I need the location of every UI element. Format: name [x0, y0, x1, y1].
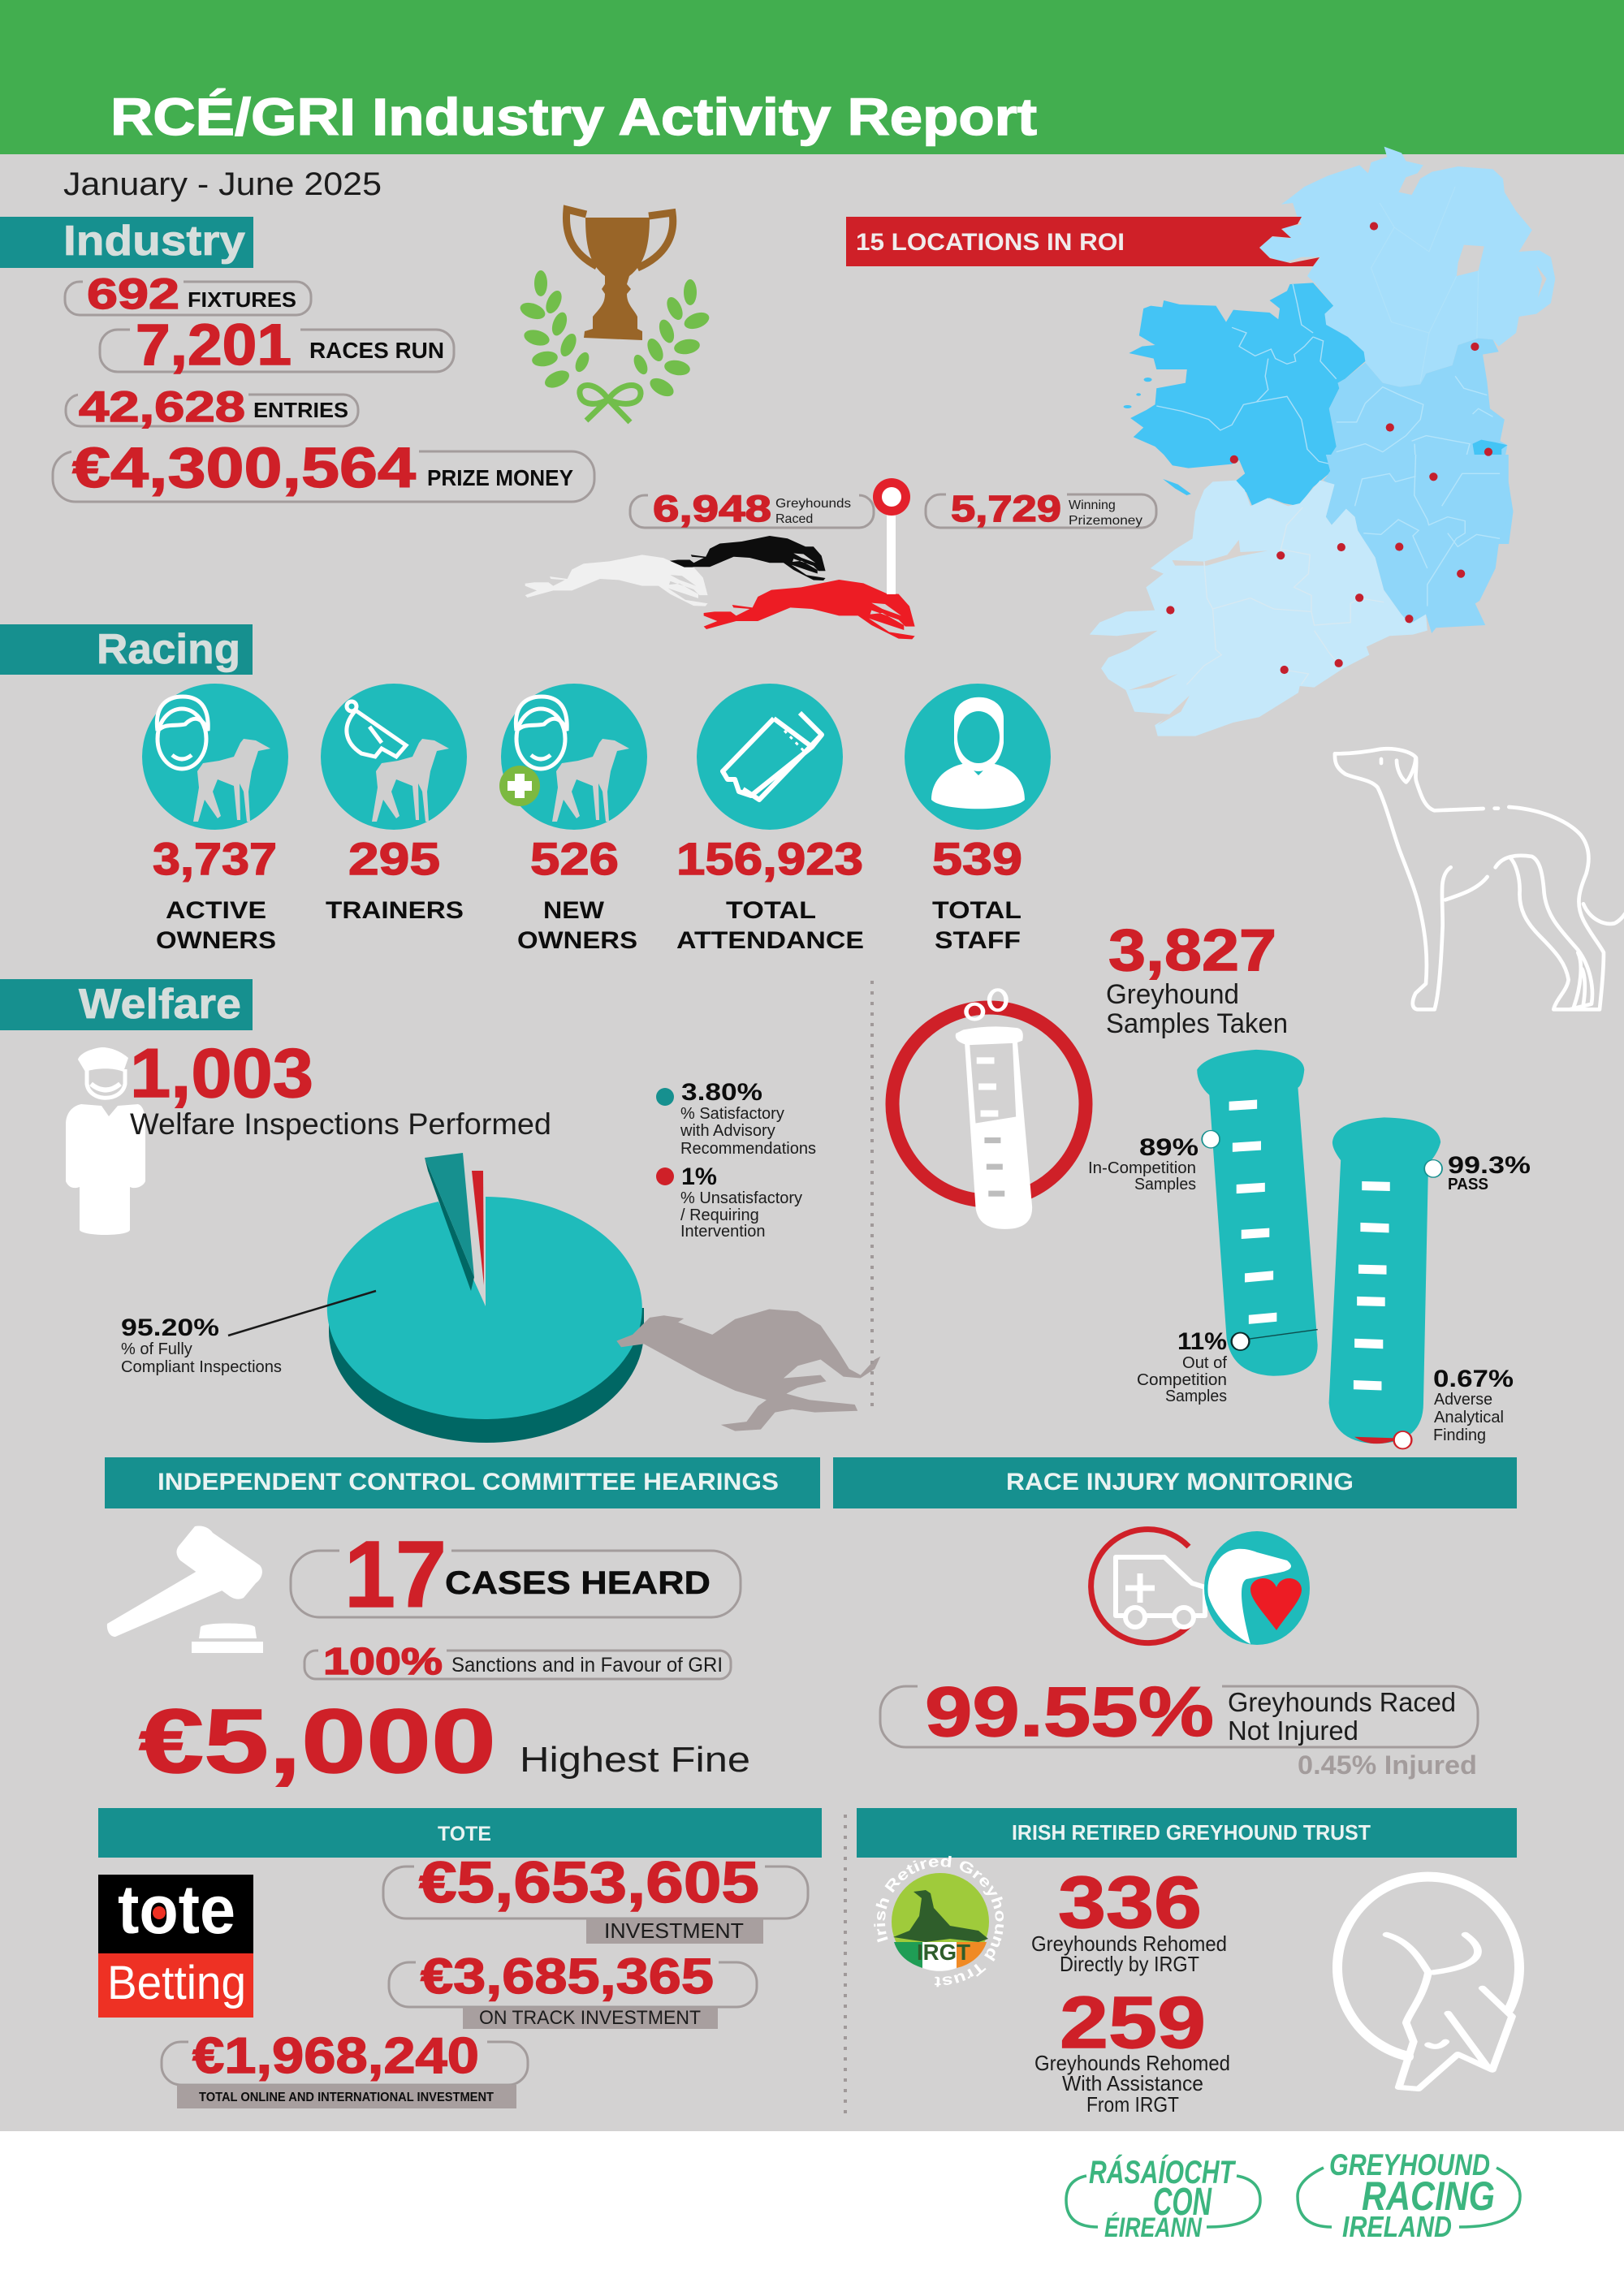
- greyhound: black: [670, 536, 826, 580]
- label: adverse analytical finding: 0.67%: [1433, 1366, 1514, 1392]
- section heading: Welfare: [0, 979, 253, 1030]
- dog head: [1207, 1549, 1291, 1644]
- label: in-competition samples: [1088, 1134, 1199, 1193]
- stat: rehomed with assistance: 259: [1060, 1983, 1206, 2064]
- stat: online and international investment: €1,968,240: [192, 2028, 479, 2084]
- pie slice: satisfactory with advisory: [425, 1153, 474, 1291]
- label: in-competition samples: In-Competition: [1088, 1159, 1196, 1177]
- chart: competition samples tube: [1197, 1050, 1318, 1376]
- stat: trainers: [321, 684, 467, 924]
- stat: cases heard: CASES HEARD: [445, 1565, 710, 1601]
- logo: tote betting: tote: [118, 1871, 235, 1948]
- section heading: Racing: [0, 624, 253, 675]
- stat: total attendance: 156,923: [676, 833, 863, 884]
- stat: on track investment: ON TRACK INVESTMENT: [479, 2007, 701, 2029]
- stat: sanctions in favour: [304, 1640, 731, 1682]
- map feature: western islands: [1124, 378, 1152, 408]
- stat: rehomed with assistance: [1034, 1983, 1230, 2117]
- logo: Rásaíocht Con Éireann: RÁSAÍOCHT: [1089, 2154, 1237, 2190]
- chart: pass and adverse finding tube: [1329, 1117, 1442, 1448]
- icon: whistle: [347, 701, 406, 757]
- greyhound: red: [704, 580, 915, 639]
- stat: fixtures: FIXTURES: [188, 287, 296, 312]
- stat: online and international investment: [162, 2028, 528, 2108]
- banner: 15 locations: 15 LOCATIONS IN ROI: [856, 229, 1125, 256]
- stat: greyhound samples taken: [1106, 918, 1288, 1039]
- map feature: Shannon estuary and bays: [1129, 540, 1268, 725]
- stat: races run: RACES RUN: [309, 338, 444, 363]
- label: in-competition samples: 89%: [1139, 1134, 1199, 1161]
- stat: total attendance: [676, 684, 864, 954]
- subtitle: date range: January - June 2025: [63, 166, 382, 202]
- marker: pass: [1424, 1160, 1442, 1177]
- map feature: Strangford Lough: [1536, 265, 1547, 298]
- stat: total staff: STAFF: [935, 927, 1021, 954]
- stat: new owners: [499, 684, 647, 954]
- tube ticks: [977, 1057, 998, 1117]
- label: in-competition samples: Samples: [1134, 1176, 1196, 1193]
- logo: tote betting: Betting: [107, 1957, 246, 2009]
- section heading: Industry: Industry: [63, 218, 245, 265]
- legend: satisfactory: [656, 1079, 816, 1158]
- stat: prize money: €4,300,564: [72, 436, 416, 499]
- stat: prize money: PRIZE MONEY: [427, 465, 573, 490]
- heading: irish retired greyhound trust: [857, 1808, 1517, 1858]
- label: pass: PASS: [1448, 1176, 1488, 1193]
- stat: greyhound samples taken: Samples Taken: [1106, 1008, 1288, 1039]
- dog back dot: [1495, 803, 1498, 814]
- label: adverse analytical finding: Adverse: [1434, 1391, 1492, 1409]
- map region: Dublin: [1473, 440, 1507, 461]
- stat: trainers: 295: [348, 833, 440, 884]
- tube scale ticks: [1229, 1100, 1276, 1324]
- stat: winning prizemoney: Prizemoney: [1069, 514, 1142, 528]
- map region: south: [1090, 481, 1427, 736]
- illustration: three running greyhounds: [525, 536, 915, 639]
- map region: east lower: [1326, 455, 1512, 633]
- stat: fixtures: [65, 270, 311, 318]
- pie slice: unsatisfactory: [472, 1171, 484, 1285]
- stat: active owners: OWNERS: [156, 927, 276, 954]
- map feature: Aran islands: [1163, 479, 1191, 495]
- map detail: southern county borders: [1186, 507, 1384, 684]
- adverse finding fill: [1354, 1437, 1399, 1444]
- stat: welfare inspections: [130, 1035, 551, 1141]
- stat: rehomed with assistance: From IRGT: [1086, 2092, 1179, 2117]
- stat: rehomed directly: Directly by IRGT: [1060, 1952, 1199, 1976]
- dog elbow: [1445, 877, 1488, 900]
- footer background: [0, 2131, 1624, 2296]
- icon: trainer dog: [372, 739, 449, 822]
- icon: ambulance and greyhound: [1091, 1530, 1310, 1645]
- heading: independent control committee hearings: [105, 1457, 820, 1508]
- illustration: grey running greyhound: [616, 1310, 880, 1431]
- map south and south-east regions: [1090, 455, 1512, 736]
- stat: entries: 42,628: [79, 383, 245, 431]
- legend: unsatisfactory: % Unsatisfactory: [680, 1189, 802, 1207]
- dog silhouette: [893, 1890, 988, 1942]
- legend: satisfactory: % Satisfactory: [680, 1105, 784, 1123]
- legend: satisfactory: 3.80%: [681, 1079, 762, 1106]
- heading: race injury monitoring: [833, 1457, 1517, 1508]
- legend: unsatisfactory: / Requiring: [680, 1206, 759, 1224]
- stat: highest fine: [139, 1690, 750, 1792]
- marker: out of competition: [1232, 1333, 1249, 1350]
- icon: new owner dog: [552, 739, 629, 822]
- stat: total staff: TOTAL: [932, 897, 1021, 924]
- stat: highest fine: Highest Fine: [520, 1740, 750, 1780]
- heart: [1250, 1578, 1302, 1630]
- legend: satisfactory: with Advisory: [680, 1122, 775, 1140]
- logo: tote betting: [98, 1871, 253, 2018]
- stat: total staff: [905, 684, 1051, 954]
- logo: Greyhound Racing Ireland: RACING: [1362, 2173, 1495, 2219]
- banner: 15 locations: [846, 217, 1320, 266]
- label: out of competition samples: 11%: [1177, 1328, 1227, 1355]
- stat: races run: 7,201: [136, 313, 292, 378]
- icon: test tube in red ring: [892, 990, 1086, 1229]
- dog back and hind leg: [1509, 807, 1604, 1009]
- stat: greyhounds raced: Greyhounds: [775, 497, 851, 511]
- panel: map of Ireland with racing locations: [1090, 147, 1555, 736]
- stat: total attendance: TOTAL: [726, 897, 816, 924]
- stat: greyhounds raced: [630, 488, 874, 529]
- stat: injured: 0.45% Injured: [1298, 1750, 1477, 1780]
- stat: on track investment: [389, 1949, 757, 2029]
- heading: tote: TOTE: [438, 1823, 491, 1845]
- pie slice: fully compliant: [327, 1197, 642, 1419]
- stat: rehomed directly: Greyhounds Rehomed: [1031, 1931, 1227, 1956]
- stat: investment: €5,653,605: [419, 1851, 759, 1915]
- stat: online and international investment: TOTAL ONLINE AND INTERNATIONAL INVESTMENT: [199, 2091, 494, 2104]
- stat: new owners: NEW: [543, 897, 605, 924]
- stat: greyhounds not injured: Not Injured: [1228, 1716, 1358, 1746]
- stat: trainers: TRAINERS: [326, 897, 464, 924]
- stat: races run: [100, 313, 454, 378]
- logo: Rásaíocht Con Éireann: CON: [1153, 2181, 1212, 2224]
- title: RCÉ/GRI Industry Activity Report: [110, 88, 1037, 146]
- legend: satisfactory: Recommendations: [680, 1140, 816, 1158]
- icon: owner dog: [193, 739, 270, 822]
- stat: total attendance: ATTENDANCE: [676, 927, 864, 954]
- dog inner hind leg: [1496, 856, 1592, 1009]
- stat: active owners: ACTIVE: [166, 897, 266, 924]
- stat: entries: [66, 383, 358, 431]
- map detail: northern county borders: [1371, 187, 1479, 382]
- label: out of competition samples: Competition: [1137, 1371, 1227, 1389]
- map markers: 15 locations: [1166, 222, 1492, 674]
- label: adverse analytical finding: Finding: [1433, 1426, 1486, 1444]
- stat: sanctions in favour: Sanctions and in Favour of GRI: [451, 1654, 723, 1677]
- bubbles: [966, 990, 1006, 1019]
- stat: new owners: OWNERS: [517, 927, 637, 954]
- map region: east upper: [1324, 339, 1514, 544]
- stat: fixtures: 692: [87, 270, 179, 318]
- section heading: Racing: Racing: [97, 626, 240, 673]
- icon: gavel: [107, 1526, 263, 1653]
- tube body: [956, 1026, 1032, 1229]
- stat: greyhounds raced: 6,948: [653, 488, 771, 529]
- section heading: Industry: [0, 217, 253, 268]
- stat: cases heard: 17: [344, 1521, 447, 1627]
- tube liquid gap: [970, 1043, 1016, 1124]
- label: pass: [1448, 1152, 1531, 1193]
- stat: welfare inspections: 1,003: [130, 1035, 313, 1112]
- stat: prize money: [53, 436, 594, 502]
- stat: cases heard: [291, 1521, 741, 1627]
- stat: welfare inspections: Welfare Inspections Performed: [130, 1107, 551, 1141]
- map region: west: [1129, 283, 1365, 506]
- stat: active owners: [142, 684, 288, 954]
- map detail: western county borders: [1156, 284, 1337, 464]
- stat: greyhounds raced: Raced: [775, 512, 813, 526]
- icon: staff person: [931, 697, 1025, 809]
- illustration: white greyhound outline: [1335, 749, 1624, 1009]
- heading: race injury monitoring: RACE INJURY MONITORING: [1006, 1469, 1354, 1495]
- heading: tote: [98, 1808, 822, 1858]
- stat: rehomed with assistance: Greyhounds Rehomed: [1034, 2051, 1230, 2075]
- flag segments: [894, 1942, 922, 1968]
- stat: new owners: 526: [530, 833, 619, 884]
- icon: tickets: [723, 713, 822, 800]
- icon: green plus: [499, 766, 540, 806]
- stat: entries: ENTRIES: [253, 398, 348, 422]
- stat: sanctions in favour: 100%: [323, 1640, 443, 1682]
- stat: total staff: 539: [932, 833, 1022, 884]
- dog eye: [1376, 759, 1387, 763]
- stat: highest fine: €5,000: [139, 1690, 496, 1792]
- logo: Greyhound Racing Ireland: [1298, 2148, 1520, 2243]
- stat: rehomed directly: [1031, 1862, 1227, 1976]
- stat: investment: [383, 1851, 808, 1944]
- icon: owner head: [157, 697, 208, 769]
- dog chest and front leg: [1335, 753, 1451, 1009]
- out of competition divider: [1249, 1330, 1318, 1339]
- chart label: fully compliant: Compliant Inspections: [121, 1358, 282, 1376]
- map detail: eastern county borders upper: [1337, 376, 1493, 525]
- chart label: fully compliant: % of Fully: [121, 1340, 192, 1358]
- label: pass: 99.3%: [1448, 1152, 1531, 1179]
- icon: finish line pin: [873, 478, 910, 594]
- chart label: fully compliant: [121, 1291, 376, 1376]
- heading: irish retired greyhound trust: IRISH RETIRED GREYHOUND TRUST: [1012, 1820, 1371, 1845]
- logo: IRGT badge: IRGT: [917, 1940, 970, 1965]
- stat: winning prizemoney: [926, 488, 1156, 529]
- label: out of competition samples: Out of: [1182, 1354, 1227, 1372]
- logo: IRGT badge: Irish Retired Greyhound Trust: [874, 1856, 1004, 1987]
- legend: unsatisfactory: 1%: [681, 1163, 717, 1190]
- legend: unsatisfactory: Intervention: [680, 1223, 766, 1241]
- map north and west regions: [1124, 147, 1555, 544]
- icon: welfare officer: [66, 1047, 145, 1235]
- dog tail: [1583, 904, 1624, 924]
- chart: welfare inspections pie: [327, 1153, 644, 1443]
- stat: active owners: 3,737: [153, 833, 277, 884]
- dog ear: [1397, 757, 1415, 782]
- dog head and neck line: [1335, 749, 1484, 810]
- label: adverse analytical finding: [1433, 1366, 1514, 1444]
- logo: Rásaíocht Con Éireann: ÉIREANN: [1104, 2212, 1203, 2243]
- stat: greyhound samples taken: Greyhound: [1106, 979, 1239, 1010]
- legend: unsatisfactory: [656, 1163, 802, 1241]
- map detail: eastern county borders lower: [1355, 455, 1500, 606]
- logo: Greyhound Racing Ireland: IRELAND: [1342, 2210, 1452, 2243]
- icon: trophy: [566, 209, 673, 340]
- stat: greyhounds not injured: 99.55%: [925, 1673, 1214, 1751]
- tube ticks lower: [984, 1137, 1004, 1197]
- icon: new owner head: [516, 697, 567, 769]
- icon: laurel wreath: [518, 270, 711, 422]
- chart label: fully compliant: 95.20%: [121, 1314, 219, 1341]
- stat: winning prizemoney: Winning: [1069, 498, 1116, 512]
- marker: adverse: [1394, 1431, 1411, 1448]
- stat: investment: INVESTMENT: [604, 1918, 744, 1943]
- tube scale ticks: [1354, 1181, 1390, 1391]
- stat: greyhounds not injured: [880, 1673, 1478, 1751]
- badge ring text: [885, 1867, 996, 1977]
- stat: winning prizemoney: 5,729: [951, 488, 1061, 529]
- ambulance: [1116, 1557, 1205, 1627]
- stat: rehomed with assistance: With Assistance: [1062, 2071, 1203, 2095]
- stat: on track investment: €3,685,365: [421, 1949, 714, 2004]
- marker: in-competition: [1202, 1130, 1220, 1148]
- map region: north: [1259, 147, 1555, 387]
- heading: independent control committee hearings: INDEPENDENT CONTROL COMMITTEE HEARINGS: [158, 1469, 779, 1495]
- header banner: [0, 0, 1624, 154]
- stat: greyhounds not injured: Greyhounds Raced: [1228, 1687, 1456, 1717]
- logo: Rásaíocht Con Éireann: [1066, 2154, 1260, 2243]
- label: adverse analytical finding: Analytical: [1434, 1409, 1504, 1426]
- stat: rehomed directly: 336: [1058, 1862, 1202, 1944]
- label: out of competition samples: [1137, 1328, 1227, 1405]
- teal circle: [1204, 1531, 1310, 1645]
- icon ring: [1091, 1530, 1190, 1643]
- pie depth: [329, 1308, 644, 1443]
- greyhound: white: [525, 555, 708, 606]
- map feature: Lough Neagh: [1457, 245, 1484, 276]
- stat: greyhound samples taken: 3,827: [1108, 918, 1276, 983]
- icon: retired greyhound in circle: [1337, 1877, 1519, 2089]
- logo: Greyhound Racing Ireland: GREYHOUND: [1329, 2148, 1490, 2182]
- label: out of competition samples: Samples: [1165, 1388, 1227, 1405]
- section heading: Welfare: Welfare: [79, 981, 241, 1028]
